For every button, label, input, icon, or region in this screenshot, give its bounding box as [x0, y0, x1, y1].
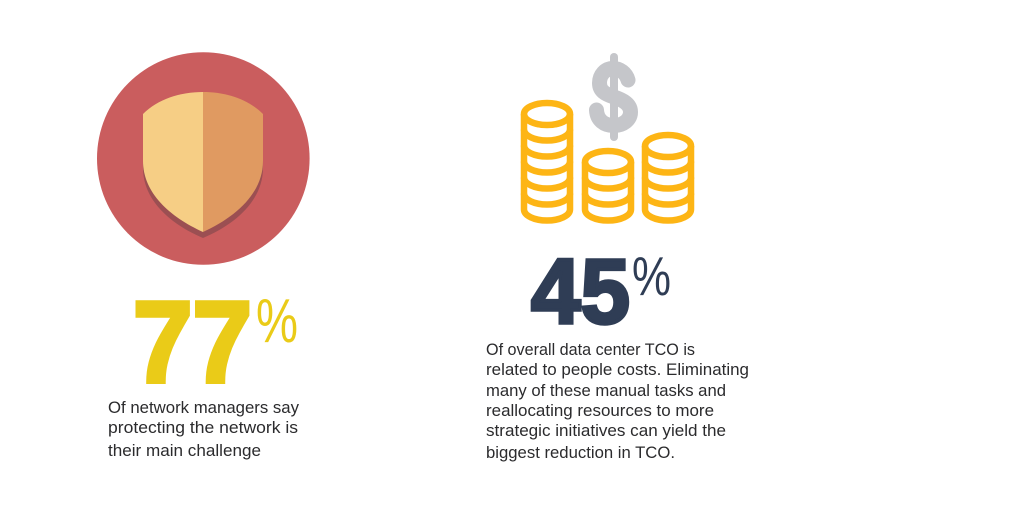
statistic: 45%: 45	[531, 241, 630, 343]
text: people costs description	[486, 340, 749, 462]
icon: shield in red circle	[97, 52, 310, 265]
icon: dollar sign	[596, 57, 630, 137]
statistic: 77%: 77	[133, 279, 252, 407]
text: people costs description: strategic initiatives can yield the	[486, 421, 726, 440]
text: people costs description: reallocating resources to more	[486, 401, 714, 420]
text: people costs description: Of overall data center TCO is	[486, 340, 695, 359]
coin stack: left	[524, 103, 570, 221]
text: people costs description: related to people costs. Eliminating	[486, 360, 749, 379]
icon: coin stacks	[524, 103, 691, 221]
statistic: 45%: %	[632, 245, 671, 307]
coin stack: right	[645, 135, 691, 221]
text: network managers description: protecting the network is	[108, 418, 298, 437]
statistic: 77%: %	[256, 287, 298, 356]
text: network managers description: Of network managers say	[108, 398, 299, 417]
text: people costs description: biggest reduction in TCO.	[486, 443, 675, 462]
text: network managers description	[108, 398, 299, 460]
text: network managers description: their main challenge	[108, 441, 261, 460]
text: people costs description: many of these manual tasks and	[486, 381, 726, 400]
coin stack: middle	[585, 151, 631, 221]
